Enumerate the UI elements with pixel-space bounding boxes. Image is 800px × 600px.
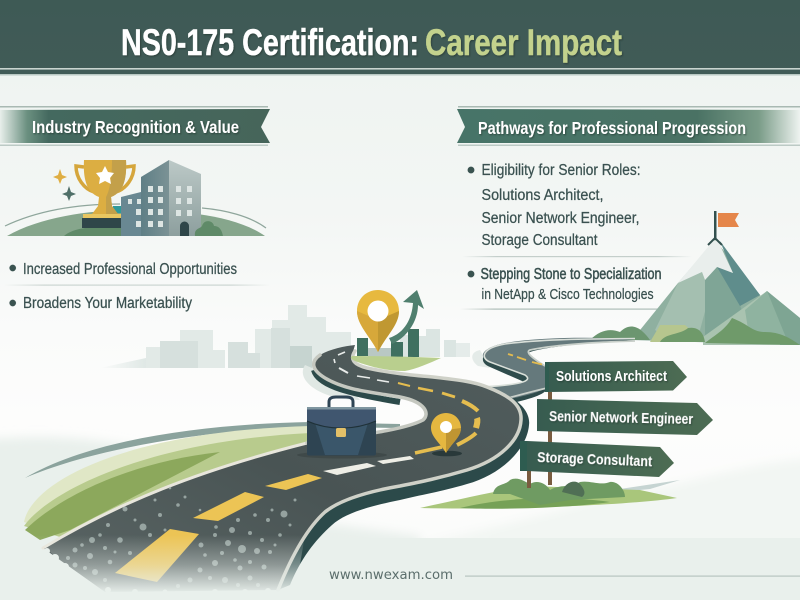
bullet: eligibility for senior roles: Storage Consultant (482, 232, 598, 249)
road fade-out at bottom (30, 535, 305, 594)
header bar (0, 0, 800, 76)
icon: large location pin (357, 290, 399, 352)
sign: Solutions Architect (545, 361, 687, 392)
bullet: eligibility for senior roles: Solutions Architect, (482, 187, 604, 204)
right section banner: Pathways for Professional Progression (457, 106, 800, 146)
lawn inside road bend (351, 356, 441, 371)
icon: summit flag (708, 211, 739, 245)
foothill bushes (590, 318, 800, 345)
bullet: eligibility for senior roles (468, 162, 640, 249)
road bottom splatter (44, 548, 271, 597)
title: NS0-175 Certification: (121, 22, 419, 63)
bullet: eligibility for senior roles: Eligibility for Senior Roles: (482, 162, 640, 179)
main mountain (632, 240, 790, 345)
right bullet list (460, 162, 692, 310)
road surface speckle (66, 487, 296, 588)
sign: Senior Network Engineer: Senior Network Engineer (549, 408, 693, 428)
road side wall (278, 387, 529, 590)
icon: sparkle stars (53, 169, 76, 201)
city bars behind pin (357, 329, 470, 357)
bullet: stepping stone to specialization: in NetApp & Cisco Technologies (482, 286, 654, 303)
lane dashes yellow large (115, 474, 322, 582)
icon: trophy (76, 160, 134, 228)
second mountain (703, 291, 800, 345)
far road segment (472, 338, 635, 405)
sign posts (527, 392, 552, 488)
lane dashes curve (398, 383, 478, 453)
sign: Solutions Architect: Solutions Architect (556, 368, 667, 385)
verge: green roadside bands (24, 422, 400, 540)
sign: Senior Network Engineer (537, 399, 713, 435)
sign: Storage Consultant (520, 441, 674, 477)
signpost island (420, 479, 680, 509)
left bullet list (4, 261, 270, 312)
icon: small location pin (431, 413, 462, 456)
icon: briefcase (297, 397, 387, 458)
title: Career Impact (425, 22, 622, 63)
sign: Storage Consultant: Storage Consultant (537, 449, 652, 470)
icon: office building (121, 160, 223, 236)
bullet: increased professional opportunities: Increased Professional Opportunities (23, 261, 237, 278)
asphalt (43, 345, 521, 592)
road edge lines (43, 351, 521, 590)
left section banner: Industry Recognition & Value (0, 106, 270, 146)
mountain with flag (590, 211, 800, 345)
right section banner: Pathways for Professional Progression: Pathways for Professional Progression (478, 118, 746, 138)
hill (5, 202, 266, 236)
illustration: trophy and office building on a hill (5, 160, 266, 236)
road shadow (303, 365, 360, 400)
lane dashes white far (334, 352, 389, 382)
footer website: www.nwexam.com (329, 567, 453, 583)
left section banner: Industry Recognition & Value: Industry Recognition & Value (32, 117, 239, 137)
lane dashes white near (323, 456, 414, 475)
bullet: eligibility for senior roles: Senior Network Engineer, (482, 210, 640, 227)
distant skyline (100, 305, 351, 368)
bullet: stepping stone to specialization (468, 266, 662, 303)
main winding road (30, 345, 529, 597)
bullet: stepping stone to specialization: Stepping Stone to Specialization (480, 266, 662, 283)
bullet: broadens your marketability: Broadens Your Marketability (23, 295, 192, 312)
growth arrow (389, 290, 424, 344)
